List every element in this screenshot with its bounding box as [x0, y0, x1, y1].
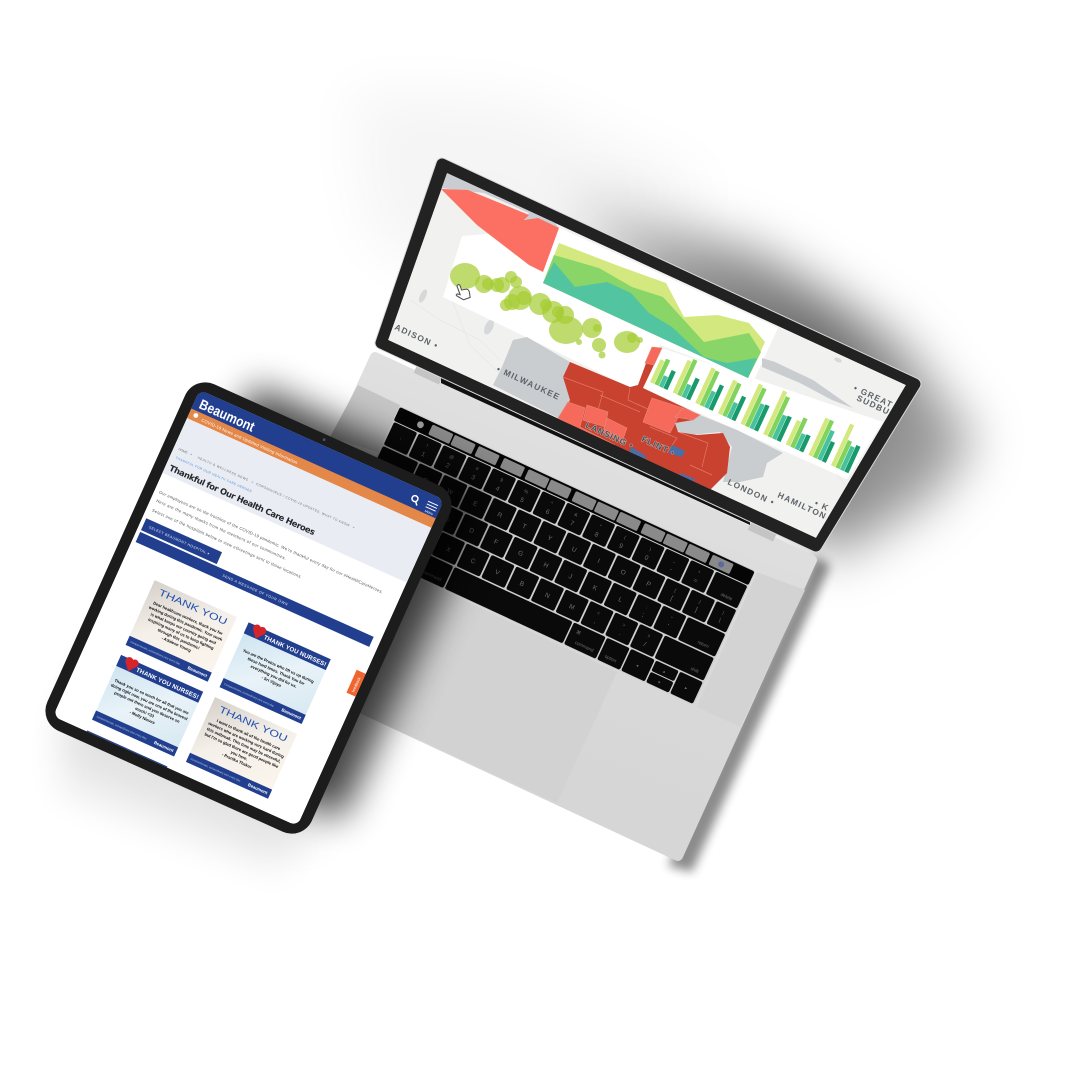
alert banner: COVID-19 News and Updated Visiting Information [201, 417, 299, 465]
map labels: HAMILTON [776, 490, 828, 521]
icon: menu: MENU [424, 509, 434, 516]
key row: zxcv: > [622, 622, 627, 628]
lid bezel [381, 164, 915, 546]
card 2: thank you nurses: - Sri Vijaya [261, 675, 283, 688]
water: Lake Huron and Erie [673, 415, 783, 482]
card 3: thank you nurses: Thank you so so much for all that you are [114, 678, 190, 716]
button: select hospital: SELECT BEAUMONT HOSPITAL ▾ [148, 525, 210, 556]
key row: qwerty: ] [694, 606, 699, 614]
key row: numbers: ( [623, 535, 627, 540]
key row: asdf: K [591, 584, 599, 593]
key row: numbers: 1 [420, 451, 427, 459]
key row: qwerty: } [698, 599, 702, 605]
icon: hand cursor [456, 284, 471, 300]
key row: qwerty: R [496, 511, 503, 520]
card 1: thank you: - Adalene Young [161, 635, 192, 653]
feedback tab: feedback [350, 676, 362, 693]
key row: zxcv: . [618, 630, 623, 637]
water: Georgian Bay [762, 358, 853, 408]
water: Lake Michigan [493, 337, 570, 418]
breadcrumbs: HEALTH & WELLNESS NEWS [197, 456, 249, 482]
speaker grille: left [330, 385, 400, 453]
card 1: thank you: inspiring many of us to keep fighting [147, 617, 215, 651]
key row: qwerty: E [472, 500, 479, 509]
card 4: thank you: I want to thank all of the health care [216, 718, 282, 751]
hinge: left [414, 365, 443, 385]
key row: asdf: ; [641, 612, 645, 619]
trackpad [350, 575, 617, 803]
card 1: thank you: THANK YOU [157, 587, 229, 628]
key row: zxcv: ? [646, 634, 651, 639]
bubble chart [450, 263, 643, 358]
key row: numbers: delete [720, 592, 734, 602]
button: send a message [136, 532, 374, 647]
key row: bottom: command [574, 640, 595, 653]
key row: qwerty: W [445, 488, 455, 497]
card 3: thank you nurses: people out there and you deserve so [114, 690, 181, 724]
card 1: thank you: Compassionate, extraordinary care every day. [130, 640, 181, 666]
card 4: thank you [186, 697, 297, 799]
key row: numbers [384, 422, 747, 609]
card 4: thank you: - Pranika Thakur [221, 752, 253, 770]
key row: numbers: _ [672, 557, 678, 564]
key row: numbers: = [692, 577, 699, 585]
intro text: Select one of the hospitals below to view eGreetings sent to those locations. [151, 508, 303, 579]
key row: asdf: : [645, 604, 648, 610]
breadcrumbs: HOME [178, 447, 188, 455]
map labels: LANSING • [584, 420, 635, 451]
key row: zxcv: Z [420, 534, 426, 542]
key row: numbers: @ [449, 454, 455, 460]
key row: numbers: # [475, 466, 480, 472]
key row: qwerty: T [521, 523, 527, 531]
counties: lighter red [558, 347, 700, 445]
key row: numbers: 0 [643, 554, 650, 562]
key row: bottom: ▴ [662, 669, 667, 674]
key row: numbers: - [668, 566, 673, 573]
laptop base [240, 357, 812, 856]
key row: zxcv: < [596, 610, 601, 616]
card 4: thank you: THANK YOU [217, 704, 289, 745]
logo: Beaumont [197, 396, 258, 435]
key row: qwerty: O [619, 569, 627, 577]
key row: numbers: 7 [569, 520, 575, 528]
speaker grille: right [697, 572, 805, 727]
card 1: thank you: is what keeps our country going and [150, 612, 217, 646]
button: select hospital [141, 518, 222, 564]
card 4: thank you: this outbreak. This time may be stressful, [206, 726, 282, 764]
key row: qwerty: [ [669, 595, 674, 602]
key row: numbers: 4 [494, 485, 501, 493]
key row: zxcv: V [494, 569, 501, 577]
key row: asdf: J [567, 573, 573, 581]
key row: bottom: option [604, 654, 618, 664]
card 1: thank you: working during this pandemic. Your work [147, 604, 224, 642]
breadcrumbs: > [190, 452, 193, 457]
region: Upper Peninsula [441, 189, 559, 272]
card 4: thank you: Compassionate, extraordinary care every day. [190, 757, 242, 783]
card 2: thank you nurses: Beaumont [281, 707, 302, 721]
key row: numbers: % [523, 488, 529, 495]
card 2: thank you nurses: these hard times. Thank You for [247, 656, 306, 686]
card 1: thank you: Beaumont [187, 665, 209, 678]
key row: zxcv: / [642, 641, 647, 648]
touch bar [394, 407, 755, 585]
card 2: thank you nurses: Compassionate, extraordinary care every day. [224, 682, 275, 708]
card 3: thank you nurses: doing right now, you are one of the bravest [110, 682, 189, 722]
key row: zxcv: B [518, 580, 525, 588]
card 3: thank you nurses: Beaumont [153, 740, 175, 753]
key row: qwerty: Q [421, 477, 429, 485]
laptop lid [381, 164, 915, 546]
page header band [162, 418, 431, 583]
key row: qwerty: \ [717, 617, 722, 625]
map labels: ADISON • [393, 322, 440, 351]
card 4: thank you: you here. [230, 749, 249, 761]
key row: qwerty: Y [546, 535, 553, 543]
card 1: thank you: Dear healthcare workers, thank you for [152, 600, 224, 636]
intro text: Here are the many thanks from the members of our communities. [156, 498, 287, 561]
card 4: thank you: but I'm so glad there are good people like [204, 731, 280, 769]
key row: bottom: ▾ [657, 679, 662, 685]
key row: zxcv [350, 494, 714, 681]
counties: blue [627, 445, 695, 484]
next card hint [87, 730, 167, 768]
key row: asdf: " [669, 616, 673, 621]
key row: qwerty [372, 446, 736, 633]
card 3: thank you nurses: - Molly Nieves [129, 710, 156, 726]
card 1: thank you: through this pandemic! [157, 627, 200, 651]
map labels: FLINT • [640, 434, 677, 458]
map labels: • MILWAUKEE [495, 364, 562, 402]
card 2: thank you nurses [220, 621, 331, 724]
keyboard [337, 406, 756, 705]
key row: numbers: 6 [544, 508, 551, 516]
water: Lake Superior [441, 173, 559, 228]
card 2: thank you nurses: THANK YOU NURSES! [262, 634, 327, 668]
card 1: thank you [126, 580, 237, 682]
map background [388, 173, 906, 538]
key row: zxcv: N [543, 592, 551, 600]
tablet screen [53, 390, 444, 826]
breadcrumbs [176, 448, 354, 528]
shadows behind laptop [60, 90, 975, 872]
breadcrumbs: CORONAVIRUS / COVID-19 UPDATES: WHAT TO KNOW [255, 482, 350, 527]
key row: numbers: ` [397, 438, 402, 445]
key row: qwerty: P [645, 580, 652, 589]
breadcrumbs: > [251, 480, 254, 484]
site header [191, 390, 444, 519]
key row: asdf: G [517, 550, 524, 558]
map roads [410, 300, 847, 519]
key row: qwerty: | [722, 610, 725, 615]
card 3: thank you nurses: much! <33 [134, 706, 156, 719]
map labels [393, 322, 895, 521]
key row: numbers: ) [649, 547, 653, 552]
hinge: right [748, 522, 777, 542]
county lines [563, 377, 712, 475]
key row: asdf: A [418, 504, 426, 512]
tablet body [38, 375, 459, 841]
key row: asdf: F [493, 538, 499, 546]
key row: asdf: H [542, 561, 550, 570]
icon: search [411, 494, 419, 506]
key row: bottom: command [422, 569, 443, 582]
region: Michigan lower peninsula [558, 347, 730, 490]
card 3: thank you nurses: THANK YOU NURSES! [135, 667, 200, 701]
card 2: thank you nurses: everything you did for us. [250, 664, 298, 689]
key row: numbers: * [599, 523, 603, 529]
laptop screen: map dashboard [388, 173, 906, 538]
tablet camera [322, 438, 326, 442]
key row: bottom: ▸ [684, 685, 689, 691]
key row: numbers: ! [426, 443, 429, 448]
icon: heart [252, 624, 266, 639]
key row: qwerty: U [570, 546, 578, 554]
card 4: thank you: Beaumont [247, 782, 269, 795]
key row: zxcv: X [445, 546, 452, 554]
key row: numbers: $ [499, 477, 504, 483]
key row: asdf: ' [665, 623, 669, 630]
bar chart [650, 358, 860, 474]
icon: heart [125, 657, 139, 672]
key row: numbers: 2 [444, 462, 451, 470]
key row: numbers: 3 [470, 474, 476, 482]
key row: zxcv: M [568, 603, 576, 612]
key row: bottom: ◂ [635, 663, 640, 668]
key row: zxcv: shift [690, 666, 700, 674]
feedback tab [346, 670, 366, 697]
map labels: SUDBU [855, 393, 892, 417]
key row: asdf: S [443, 516, 451, 524]
lid rim [381, 164, 915, 546]
key row: asdf: L [617, 596, 624, 604]
key row: asdf: return [697, 639, 710, 649]
map labels: • K [813, 498, 831, 513]
map labels: LONDON • [726, 477, 777, 507]
button: send a message: SEND A MESSAGE OF YOUR OWN [222, 574, 288, 607]
key row: numbers: ^ [550, 501, 554, 506]
intro text: Our employees are on the frontline of the COVID-19 pandemic. We're thankful every day for our #HealthCareHeroes. [158, 489, 384, 594]
key row: qwerty: I [596, 558, 601, 565]
key row: bottom: ⌘ [575, 629, 582, 637]
key row: numbers: 8 [593, 531, 600, 539]
key row: numbers: + [697, 569, 702, 575]
key row: numbers: & [574, 512, 578, 518]
key row: numbers: 5 [519, 497, 525, 505]
area chart [543, 243, 765, 378]
tablet [38, 375, 459, 841]
breadcrumbs: > [352, 525, 355, 530]
key row: qwerty: { [674, 588, 678, 593]
key row: zxcv: , [593, 618, 597, 625]
page title: Thankful for Our Health Care Heroes [168, 463, 317, 537]
hinge band [441, 360, 750, 525]
icon: menu [424, 500, 438, 515]
white panel: bubble and area charts [443, 228, 778, 392]
key row: asdf: D [468, 527, 475, 535]
card 3: thank you nurses [92, 653, 204, 757]
white panel: bar chart [643, 345, 883, 479]
card 4: thank you: workers who are working very hard during [207, 720, 285, 759]
key row: zxcv: C [469, 557, 477, 566]
tablet cast shadow [60, 385, 492, 850]
card 2: thank you nurses: You are the Protos who lift us up during [242, 648, 315, 684]
alert banner [187, 408, 436, 528]
breadcrumbs: THANKFUL FOR OUR HEALTH CARE HEROES [175, 456, 252, 493]
key row: bottom [339, 518, 703, 704]
key row: numbers: 9 [618, 542, 624, 551]
small lakes [417, 288, 842, 364]
card 3: thank you nurses: Compassionate, extraordinary care every day. [96, 714, 148, 741]
map labels: • GREAT [852, 383, 895, 410]
key row: asdf [361, 470, 725, 657]
